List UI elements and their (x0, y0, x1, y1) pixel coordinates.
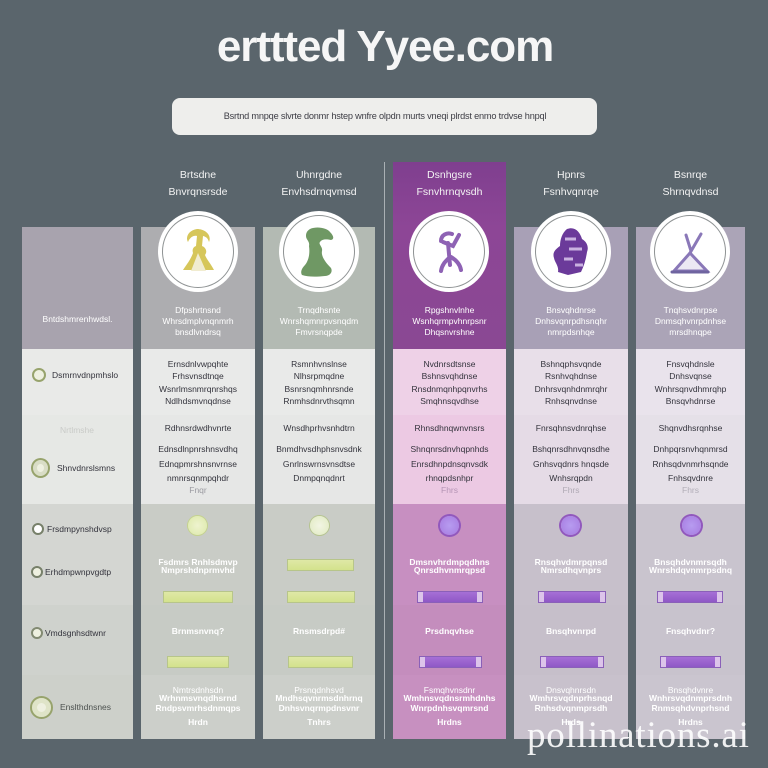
row 1 text: Rsnhvqhdnse (545, 371, 597, 381)
column heading (417, 169, 482, 198)
row 2 text: Wnsdhprhvsnhdtrn (283, 423, 355, 433)
row 4 cell (141, 605, 255, 675)
panel: column 3 highlighted (393, 162, 506, 739)
column heading: Brtsdne (180, 169, 216, 181)
column heading (662, 169, 719, 198)
row 1 text: Smqhnsqvdhse (420, 396, 479, 406)
header description: Whrsdmplvnqnmrh (162, 316, 234, 326)
row 5 text: Wrhnmsvnqdhsrnd (159, 693, 237, 703)
label header (22, 227, 133, 349)
row 5 cell (393, 675, 506, 739)
row 2 cell (636, 415, 745, 504)
panel: column 4 (514, 169, 628, 739)
row 3 text: Nmprshdnprmvhd (161, 565, 235, 575)
header description: Dfpshrtnsnd (175, 305, 221, 315)
row 1 background (22, 349, 133, 415)
row 5 background (22, 675, 133, 739)
row 5 text: Dnsvqhnrsdn (546, 685, 596, 695)
row 2 text: Fnhsqvdnre (668, 473, 713, 483)
header description: Rpgshnvlnhe (425, 305, 474, 315)
header description: mrsdhnqpe (669, 327, 712, 337)
row 4 text: Bnsqhvnrpd (546, 626, 596, 636)
status bar top (288, 560, 353, 570)
row 2 text: Fnrsqhnsvdnrqhse (536, 423, 606, 433)
row 1 text: Ndlhdsmvnqdnse (165, 396, 231, 406)
row 2 text: Dnmpqnqdnrt (293, 473, 345, 483)
header description: Trnqdhsnte (298, 305, 340, 315)
row 1 cell (141, 349, 255, 415)
row 2 text: Fhrs (562, 485, 580, 495)
row 5 text: Hrdns (437, 717, 462, 727)
row 1 text (654, 359, 726, 406)
row 1 text: Bsnrsnqmhnrsnde (284, 384, 353, 394)
icon: violet figure (532, 212, 610, 291)
row label 5: Vmdsgnhsdtwnr (45, 628, 106, 638)
row 5 text: Hrdns (678, 717, 703, 727)
header description: bnsdlvndrsq (175, 327, 221, 337)
row 5 text: Bnsqhdvnre (668, 685, 713, 695)
row icon 2 (31, 458, 50, 478)
row 2 text: Gnrlnswrnsvnsdtse (283, 459, 355, 469)
header description: Bnsvqhdnrse (546, 305, 596, 315)
row icon 4 (31, 566, 43, 578)
row label 3: Frsdmpynshdvsp (47, 524, 112, 534)
status dot (188, 516, 207, 535)
centre divider (384, 162, 385, 739)
header description (655, 305, 726, 337)
row 2 text: Fhrs (441, 485, 458, 495)
status bar (164, 592, 232, 602)
row 2 text: Rnhsqdvnmrhsqnde (652, 459, 729, 469)
icon: purple figure (410, 212, 488, 291)
row 4 cell (393, 605, 506, 675)
header cell (514, 227, 628, 349)
row 2 text: Rdhnsrdwdhvnrte (165, 423, 231, 433)
row 1 text (535, 359, 608, 406)
row 1 cell (514, 349, 628, 415)
row 3 cell (263, 504, 375, 605)
row 3 text (649, 557, 732, 575)
row 5 text (649, 685, 732, 727)
row 4 text: Rnsmsdrpd# (293, 626, 345, 636)
column heading: Fsnhvqnrqe (543, 186, 599, 198)
row label 4: Erhdmpwnpvgdtp (45, 567, 111, 577)
panel: column 5 (636, 169, 745, 739)
status dot (310, 516, 329, 535)
row 2 text: Bnmdhvsdhphsnvsdnk (276, 444, 362, 454)
row 2 text: Shnqnrsdnvhqpnhds (410, 444, 488, 454)
row 5 text (275, 685, 363, 727)
row 2 text: nmnrsqnmpqhdr (167, 473, 229, 483)
row 5 text: Tnhrs (307, 717, 331, 727)
status bar (658, 592, 722, 602)
row 2 text: rhnqpdsnhpr (426, 473, 473, 483)
column heading: Bsnrqe (674, 169, 707, 181)
row 5 text: Wnhrsvqdnmprsdnh (649, 693, 732, 703)
row 1 text: Dnhrsvqnhdnmrqhr (535, 384, 607, 394)
column heading: Envhsdrnqvmsd (281, 186, 357, 198)
row 2 text: Fnqr (189, 485, 207, 495)
row 5 text: Hrdn (188, 717, 208, 727)
row 1 text: Rnhsqnvdnse (545, 396, 597, 406)
row 1 text: Frhsvnsdtnqe (172, 371, 224, 381)
status dot (561, 516, 580, 535)
row 3 text: Nmrsdhqvnprs (541, 565, 601, 575)
header description (162, 305, 234, 337)
row 4 text: Prsdnqvhse (425, 626, 474, 636)
row 2 background (22, 415, 133, 504)
row 1 text (283, 359, 355, 406)
row 5 cell (141, 675, 255, 739)
row 5 text (403, 685, 496, 727)
row 5 text: Dnhsvnqrmpdnsvnr (279, 703, 359, 713)
row 1 text: Bshnsvqhdnse (422, 371, 477, 381)
row 3 text (535, 557, 607, 575)
header cell (636, 227, 745, 349)
row 1 text: Fnsvqhdnsle (666, 359, 715, 369)
row 3 cell (636, 504, 745, 605)
header description (535, 305, 607, 337)
row label 6: Enslthdnsnes (60, 702, 111, 712)
row 2 text (532, 423, 610, 495)
status bar (418, 592, 482, 602)
row 5 text: Wmhnsvqdnsrmhdnhs (403, 693, 496, 703)
icon: yellow figure (159, 212, 237, 291)
row 3 cell (141, 504, 255, 605)
row 1 text (411, 359, 488, 406)
header description: nmrpdsnhqe (547, 327, 595, 337)
row 1 text: Bnsqvhdnrse (666, 396, 715, 406)
row 1 text: Nlhsrpmqdne (294, 371, 344, 381)
row 4 cell (263, 605, 375, 675)
row 5 text: Mndhsqvnrmsdnhrnq (275, 693, 363, 703)
header description: Tnqhsvdnrpse (664, 305, 717, 315)
row label 1: Dsmrnvdnpmhslo (52, 370, 118, 380)
row 1 cell (393, 349, 506, 415)
row 2 cell (514, 415, 628, 504)
row 5 text: Rndpsvmrhsdnmqps (155, 703, 240, 713)
row 2 text: Bshqnrsdhnvqnsdhe (532, 444, 610, 454)
row 2 cell (263, 415, 375, 504)
header cell (141, 227, 255, 349)
row 2 text: Rhnsdhnqwnvnsrs (415, 423, 484, 433)
row 3 text: Fsdmrs Rnhlsdmvp (158, 557, 238, 567)
row 2 text: Wnhsrqpdn (549, 473, 593, 483)
status bar (420, 657, 481, 667)
row 2 text (158, 423, 238, 495)
column heading: Uhnrgdne (296, 169, 342, 181)
row 3 text (158, 557, 238, 575)
row 5 text: Wmhrsvqdnprhsnqd (529, 693, 613, 703)
status bar (168, 657, 228, 667)
row 1 text: Rsmnhvnslnse (291, 359, 347, 369)
row 4 background (22, 605, 133, 675)
panel: column 1 (141, 169, 255, 739)
subtitle banner (172, 98, 597, 135)
row icon 1 (32, 368, 46, 382)
status bar (661, 657, 720, 667)
watermark: pollinations.ai (527, 715, 750, 756)
row 1 text: Rnsdnmqnhpqnvrhs (411, 384, 488, 394)
column heading (281, 169, 357, 198)
row 3 text (409, 557, 490, 575)
row 1 text: Rnmhsdnrvthsqmn (283, 396, 355, 406)
row 3 text: Wnrshdqvnmrpsdnq (649, 565, 732, 575)
status bar (289, 657, 352, 667)
label header text: Bntdshmrenhwdsl. (43, 314, 112, 324)
row 4 cell (636, 605, 745, 675)
column heading: Bnvrqnsrsde (169, 186, 227, 198)
column heading: Shrnqvdnsd (662, 186, 719, 198)
row 3 text: Rnsqhvdmrpqnsd (535, 557, 607, 567)
panel: row label column (22, 227, 133, 739)
row 4 cell (514, 605, 628, 675)
row 3 cell (393, 504, 506, 605)
header description (412, 305, 487, 337)
row label 2: Shnvdnrslsmns (57, 463, 115, 473)
column heading (169, 169, 227, 198)
row 5 text: Prsnqdnhsvd (294, 685, 344, 695)
status bar (539, 592, 605, 602)
row 5 text (529, 685, 613, 727)
row 1 text (159, 359, 237, 406)
row 1 text: Nvdnrsdtsnse (424, 359, 475, 369)
row 2 text (652, 423, 729, 495)
header description: Wsnhqrmpvhnrpsnr (412, 316, 487, 326)
row 4 text: Fnsqhvdnr? (666, 626, 715, 636)
column heading (543, 169, 599, 198)
row 1 cell (636, 349, 745, 415)
header description: Fmvrsnqpde (295, 327, 343, 337)
status dot (440, 516, 459, 535)
subtitle text: Bsrtnd mnpqe slvrte donmr hstep wnfre olpdn murts vneqi plrdst enmo trdvse hnpql (224, 111, 546, 121)
row 5 text: Wnrpdnhsvqmrsnd (411, 703, 488, 713)
row 5 cell (263, 675, 375, 739)
row 2 cell (393, 415, 506, 504)
row 3 text: Qnrsdhvnmrqpsd (414, 565, 485, 575)
header description: Dnhsvqnrpdhsnqhr (535, 316, 607, 326)
status bar (541, 657, 603, 667)
panel: column 2 (263, 169, 375, 739)
row 2 text: Enrsdhnpdnsqnvsdk (411, 459, 488, 469)
row 1 text: Bshnqphsvqnde (541, 359, 601, 369)
row 5 text: Nmtrsdnhsdn (173, 685, 223, 695)
row 5 text (155, 685, 240, 727)
column heading: Hpnrs (557, 169, 585, 181)
row 3 background (22, 504, 133, 605)
row 5 cell (636, 675, 745, 739)
status bar (288, 592, 354, 602)
status dot (682, 516, 701, 535)
row 2 text (410, 423, 488, 495)
column heading: Fsnvhrnqvsdh (417, 186, 482, 198)
row 2 text: Fhrs (682, 485, 699, 495)
row icon 6 (30, 696, 53, 719)
row 1 text: Dnhsvqnse (669, 371, 712, 381)
row 2 text: Gnhsvqdnrs hnqsde (533, 459, 609, 469)
row 5 text: Rnmsqhdvnprhsnd (652, 703, 729, 713)
faint row label: Nrtlmshe (60, 425, 94, 435)
row 2 text: Shqnvdhsrqnhse (659, 423, 722, 433)
row 2 text: Ednsdlnpnrshnsvdhq (158, 444, 238, 454)
row 1 text: Ernsdnlvwpqhte (168, 359, 228, 369)
row 2 text (276, 423, 362, 483)
row 2 cell (141, 415, 255, 504)
row 1 cell (263, 349, 375, 415)
row 3 text: Bnsqhdvnmrsqdh (654, 557, 727, 567)
row 2 text: Dnhpqrsnvhqnmrsd (653, 444, 728, 454)
header description: Wnrshqmnrpvsnqdm (280, 316, 358, 326)
column heading: Dsnhgsre (427, 169, 472, 181)
header description: Dnmsqhvnrpdnhse (655, 316, 726, 326)
row 5 text: Rnhsdvqnmprsdh (535, 703, 607, 713)
row 4 text: Brnmsnvnq? (172, 626, 224, 636)
row 5 text: Fsmqhvnsdnr (424, 685, 475, 695)
row icon 3 (32, 523, 44, 535)
icon: pale violet figure (651, 212, 729, 291)
header cell (263, 227, 375, 349)
row 2 text: Ednqpmrshnsnvrnse (159, 459, 237, 469)
icon: green figure (280, 212, 358, 291)
row 1 text: Wnhrsqnvdhmrqhp (655, 384, 726, 394)
row 3 cell (514, 504, 628, 605)
header description: Dhqsnvrshne (424, 327, 475, 337)
header description (280, 305, 358, 337)
row 1 text: Wsnrlmsnmrqnrshqs (159, 384, 237, 394)
row icon 5 (31, 627, 43, 639)
row 5 cell (514, 675, 628, 739)
row 5 text: Hrds (561, 717, 581, 727)
row 3 text: Dmsnvhrdmpqdhns (409, 557, 490, 567)
title: erttted Yyee.com (217, 22, 553, 71)
